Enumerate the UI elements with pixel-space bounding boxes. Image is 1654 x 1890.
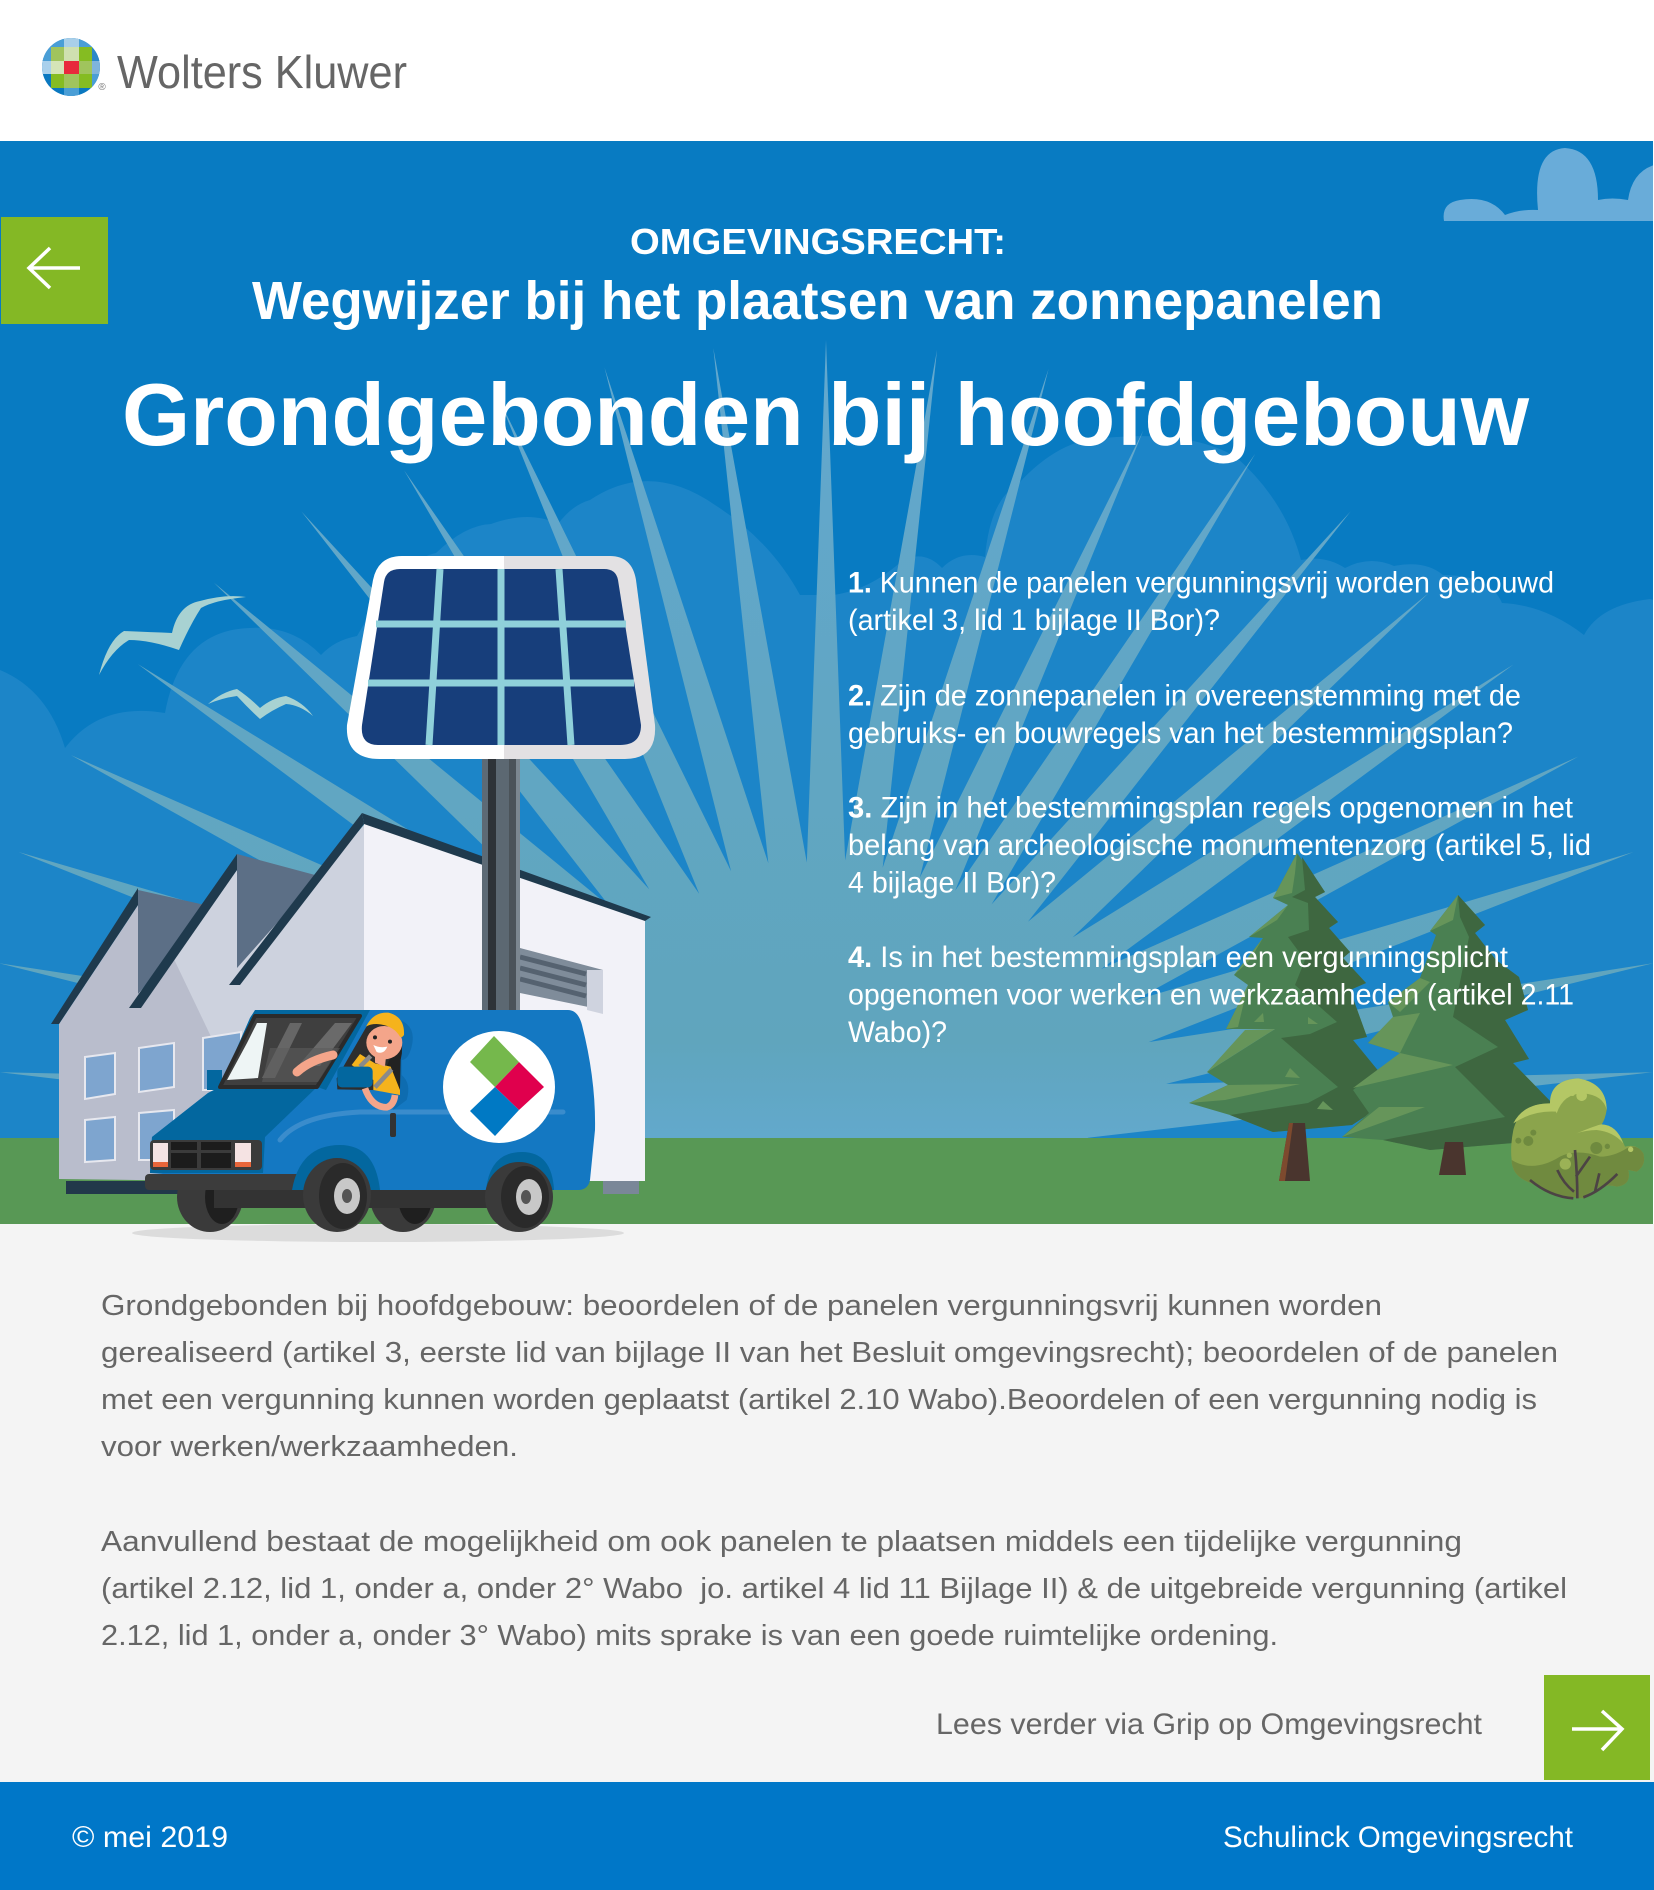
question 4: opgenomen voor werken en werkzaamheden (artikel 2.11	[848, 978, 1574, 1012]
shadow on van	[393, 1020, 413, 1110]
question 3	[848, 792, 1591, 900]
question 4: 4. Is in het bestemmingsplan een vergunningsplicht	[848, 941, 1509, 974]
smile	[373, 1045, 387, 1053]
foundation right	[603, 1181, 639, 1194]
paragraph 1: Grondgebonden bij hoofdgebouw: beoordelen of de panelen vergunningsvrij kunnen worden	[101, 1290, 1382, 1322]
paragraph 1	[101, 1290, 1558, 1463]
question 1: 1. Kunnen de panelen vergunningsvrij worden gebouwd	[848, 566, 1554, 600]
grille	[150, 1140, 262, 1170]
next button	[1544, 1675, 1650, 1780]
back button	[1, 217, 108, 324]
wheel arches	[292, 1145, 554, 1190]
panel frame right	[504, 556, 655, 759]
side window	[337, 1023, 400, 1091]
kicker: OMGEVINGSRECHT:	[630, 221, 1006, 262]
registered mark: ®	[98, 82, 106, 93]
footer	[0, 1782, 1654, 1890]
shirt	[352, 1054, 400, 1095]
question 4: Wabo)?	[848, 1016, 947, 1049]
windshield	[220, 1016, 360, 1087]
front wheel	[303, 1158, 371, 1232]
question 2: 2. Zijn de zonnepanelen in overeenstemming met de	[848, 680, 1521, 712]
panel frame left	[347, 556, 504, 759]
roof edge dark	[220, 1010, 370, 1090]
pole	[482, 757, 520, 1012]
paragraph 1: met een vergunning kunnen worden geplaatst (artikel 2.10 Wabo).Beoordelen of een vergunning nodig is	[101, 1384, 1537, 1416]
illustration: bush	[1511, 1078, 1644, 1198]
bumper	[145, 1174, 307, 1190]
panel cells	[362, 569, 641, 745]
paragraph 2: (artikel 2.12, lid 1, onder a, onder 2° Wabo jo. artikel 4 lid 11 Bijlage II) & de uitgebreide vergunning (artikel	[101, 1573, 1567, 1605]
title block	[122, 221, 1530, 464]
paragraph 2: 2.12, lid 1, onder a, onder 3° Wabo) mits sprake is van een goede ruimtelijke ordening.	[101, 1620, 1278, 1652]
header: Wolters Kluwer logo	[42, 38, 407, 98]
tree right	[1342, 895, 1552, 1175]
question 1	[848, 566, 1554, 637]
belt line	[280, 1112, 563, 1140]
paragraph 2	[101, 1526, 1567, 1652]
mirror front	[207, 1070, 222, 1090]
door mirror	[337, 1067, 373, 1087]
roof lines	[51, 813, 651, 1024]
question 2	[848, 680, 1521, 750]
van body	[150, 1010, 595, 1190]
foundation	[66, 1181, 216, 1194]
large background clouds	[0, 436, 1653, 1138]
trunk right	[1439, 1142, 1466, 1175]
hood	[150, 1087, 317, 1173]
trunk left	[1279, 1123, 1310, 1181]
paragraph 1: voor werken/werkzaamheden.	[101, 1431, 518, 1463]
paragraph 1: gerealiseerd (artikel 3, eerste lid van bijlage II van het Besluit omgevingsrecht); beoordelen of de panelen	[101, 1337, 1558, 1369]
left wall	[59, 905, 215, 1181]
main title: Grondgebonden bij hoofdgebouw	[122, 365, 1530, 464]
panel: body background	[0, 1224, 1654, 1782]
sky background	[0, 141, 1653, 748]
vent	[520, 948, 603, 1014]
neck	[375, 1053, 386, 1067]
hair	[387, 1033, 402, 1090]
question 3: 3. Zijn in het bestemmingsplan regels opgenomen in het	[848, 792, 1574, 824]
illustration: solar panel on pole	[347, 556, 655, 1012]
wordmark: Wolters Kluwer	[117, 46, 407, 98]
icon: pixel globe	[42, 38, 100, 96]
lower arm	[365, 1088, 395, 1107]
illustration: building	[51, 813, 651, 1194]
subtitle: Wegwijzer bij het plaatsen van zonnepanelen	[252, 271, 1383, 331]
overall straps	[360, 1056, 392, 1087]
icon: birds	[99, 596, 313, 719]
panel grid	[368, 569, 634, 745]
tree left	[1189, 853, 1383, 1181]
read more link: Lees verder via Grip op Omgevingsrecht	[936, 1708, 1483, 1741]
light wall	[172, 825, 364, 1181]
cap	[366, 1013, 404, 1037]
icon: left arrow	[29, 248, 80, 288]
sun rays	[0, 342, 1652, 1138]
copyright: © mei 2019	[72, 1821, 228, 1854]
question 3: 4 bijlage II Bor)?	[848, 866, 1056, 900]
door handle	[390, 1113, 396, 1137]
icon: right arrow	[1572, 1711, 1622, 1750]
rear tyres	[177, 1162, 436, 1232]
head	[366, 1026, 402, 1059]
rear wheel	[485, 1162, 553, 1232]
illustration: pine trees	[1189, 853, 1552, 1181]
body text block	[101, 1290, 1567, 1741]
shadow under van	[132, 1224, 624, 1242]
slate gable backs	[134, 890, 205, 1000]
white wall	[364, 820, 645, 1181]
paragraph 2: Aanvullend bestaat de mogelijkheid om ook panelen te plaatsen middels een tijdelijke vergunning	[101, 1526, 1462, 1558]
illustration: van with driver	[145, 1010, 595, 1232]
under chassis	[214, 1186, 494, 1208]
question 3: belang van archeologische monumentenzorg (artikel 5, lid	[848, 829, 1591, 862]
question 1: (artikel 3, lid 1 bijlage II Bor)?	[848, 604, 1220, 637]
logo circle	[443, 1031, 555, 1143]
eyes	[373, 1035, 377, 1039]
ground	[0, 1138, 1654, 1224]
panel: sky scene	[0, 141, 1654, 1224]
question 4	[848, 941, 1574, 1049]
publisher name: Schulinck Omgevingsrecht	[1223, 1821, 1574, 1854]
driver with side window	[337, 1013, 413, 1110]
question 2: gebruiks- en bouwregels van het bestemmingsplan?	[848, 717, 1513, 750]
small cloud top right	[1444, 148, 1654, 221]
windows	[85, 1032, 241, 1162]
questions list	[848, 566, 1591, 1049]
